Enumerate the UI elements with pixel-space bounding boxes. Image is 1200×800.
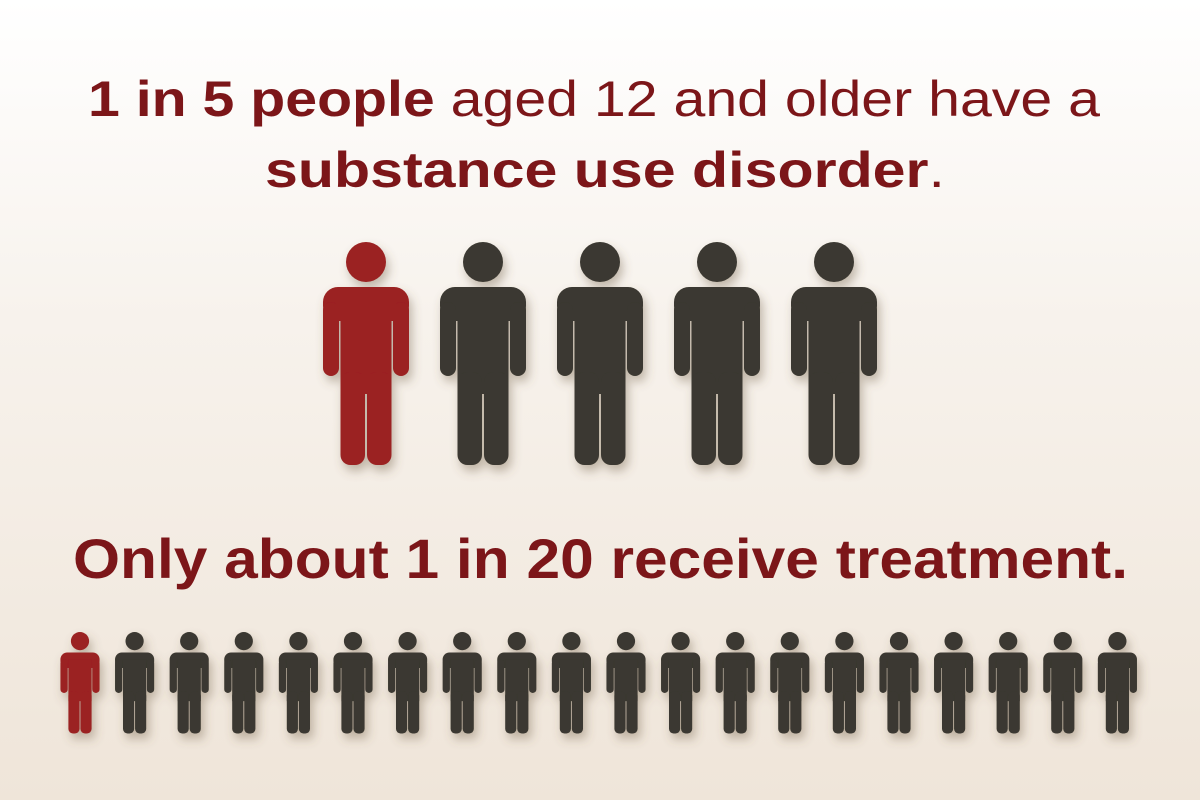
heading: 1 in 5 (88, 71, 1100, 198)
heading: 1 in 5: 1 in 5 people aged 12 and older have a (88, 71, 1100, 127)
heading: 1 in 5: substance use disorder . (265, 142, 945, 198)
heading: 1 in 20: Only about 1 in 20 receive treatment. (73, 527, 1128, 590)
big figures: 1 in 5 (323, 242, 877, 465)
small figures: 1 in 20 (60, 632, 1137, 733)
